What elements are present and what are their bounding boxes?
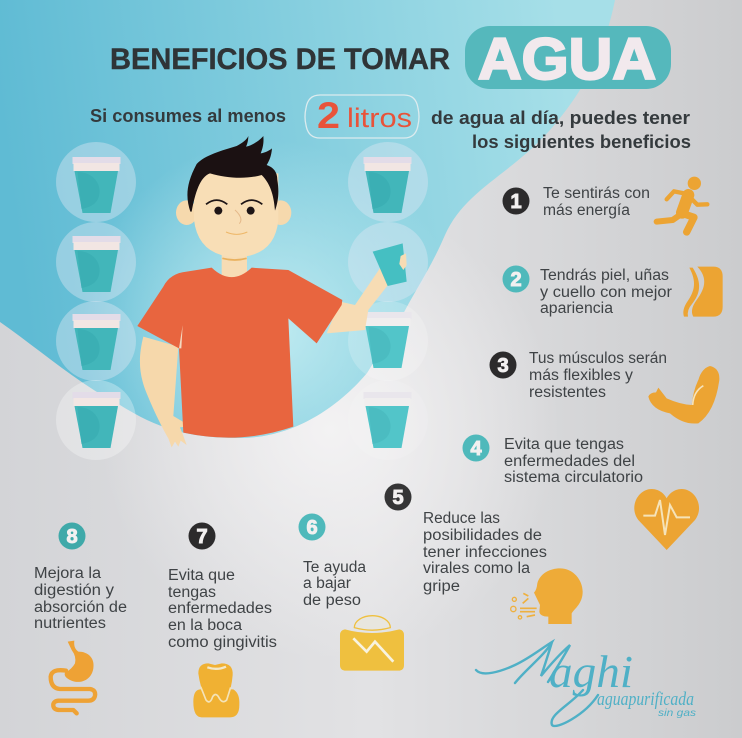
- benefit 7: 7: [196, 526, 208, 548]
- benefit 5: virales como la: [423, 560, 530, 577]
- logo: Naghi agua purificada: sin gas: [658, 707, 697, 719]
- benefit 5: posibilidades de: [423, 527, 542, 544]
- logo: Naghi agua purificada: [476, 642, 697, 726]
- right column of glasses: [348, 142, 428, 460]
- benefit 7: como gingivitis: [168, 634, 277, 651]
- benefit 3: Tus músculos serán: [529, 350, 667, 367]
- benefit 4: enfermedades del: [504, 453, 635, 470]
- benefit 5: gripe: [423, 578, 460, 595]
- benefit 8: 8: [66, 526, 78, 548]
- blue wave background: [0, 0, 615, 438]
- badge: AGUA: AGUA: [478, 27, 656, 92]
- benefit 4: [462, 434, 643, 486]
- benefit 3: resistentes: [529, 384, 606, 401]
- logo: Naghi agua purificada: aguapurificada: [597, 689, 694, 710]
- benefit 7: [168, 522, 277, 651]
- benefit 1: [502, 185, 650, 219]
- benefit 3: 3: [497, 355, 509, 377]
- benefit 6: Te ayuda: [303, 559, 366, 576]
- benefit 8: absorción de: [34, 599, 127, 616]
- benefit 4: 4: [470, 438, 482, 460]
- subtitle right: los siguientes beneficios: [472, 131, 691, 152]
- left column of glasses: [56, 142, 136, 460]
- icon: weight scale: [340, 616, 404, 671]
- benefit 8: nutrientes: [34, 615, 106, 632]
- icon: runner: [657, 177, 707, 232]
- benefit 6: a bajar: [303, 575, 351, 592]
- benefit 7: Evita que: [168, 567, 235, 584]
- benefit 4: sistema circulatorio: [504, 469, 643, 486]
- benefit 8: [34, 522, 127, 632]
- icon: skin: [683, 267, 723, 317]
- benefit 6: [298, 514, 366, 609]
- benefit 6: 6: [306, 517, 318, 539]
- highlight: 2 litros: [305, 95, 419, 138]
- benefit 3: más flexibles y: [529, 367, 633, 384]
- benefit 1: más energía: [543, 202, 630, 219]
- benefit 2: Tendrás piel, uñas: [540, 267, 669, 284]
- highlight: 2 litros: 2: [317, 95, 340, 136]
- benefit 1: Te sentirás con: [543, 185, 650, 202]
- icon: digestive system: [51, 641, 95, 713]
- character drinking water: [137, 136, 407, 447]
- benefit 7: en la boca: [168, 617, 242, 634]
- benefit 8: digestión y: [34, 582, 114, 599]
- benefit 5: tener infecciones: [423, 544, 547, 561]
- benefit 4: Evita que tengas: [504, 436, 624, 453]
- benefit 8: Mejora la: [34, 565, 101, 582]
- subtitle left: Si consumes al menos: [90, 105, 286, 126]
- title: BENEFICIOS DE TOMAR: [110, 43, 450, 76]
- benefit 2: y cuello con mejor: [540, 284, 672, 301]
- icon: heart: [634, 489, 699, 550]
- benefit 7: tengas: [168, 584, 216, 601]
- benefit 6: de peso: [303, 592, 361, 609]
- icon: tooth: [193, 663, 239, 717]
- logo: Naghi agua purificada: aghi: [549, 646, 633, 697]
- benefit 2: [502, 266, 672, 317]
- subtitle right: [431, 107, 691, 152]
- icon: sneezing head: [511, 568, 583, 624]
- benefit 7: enfermedades: [168, 600, 272, 617]
- benefit 3: [490, 350, 667, 401]
- benefit 5: [384, 484, 547, 595]
- benefit 5: 5: [392, 487, 404, 509]
- benefit 2: apariencia: [540, 300, 613, 317]
- benefit 1: 1: [510, 191, 522, 213]
- subtitle right: de agua al día, puedes tener: [431, 107, 690, 128]
- highlight: 2 litros: litros: [347, 103, 412, 133]
- benefit 5: Reduce las: [423, 510, 500, 527]
- icon: arm: [648, 366, 719, 424]
- benefit 2: 2: [510, 269, 522, 291]
